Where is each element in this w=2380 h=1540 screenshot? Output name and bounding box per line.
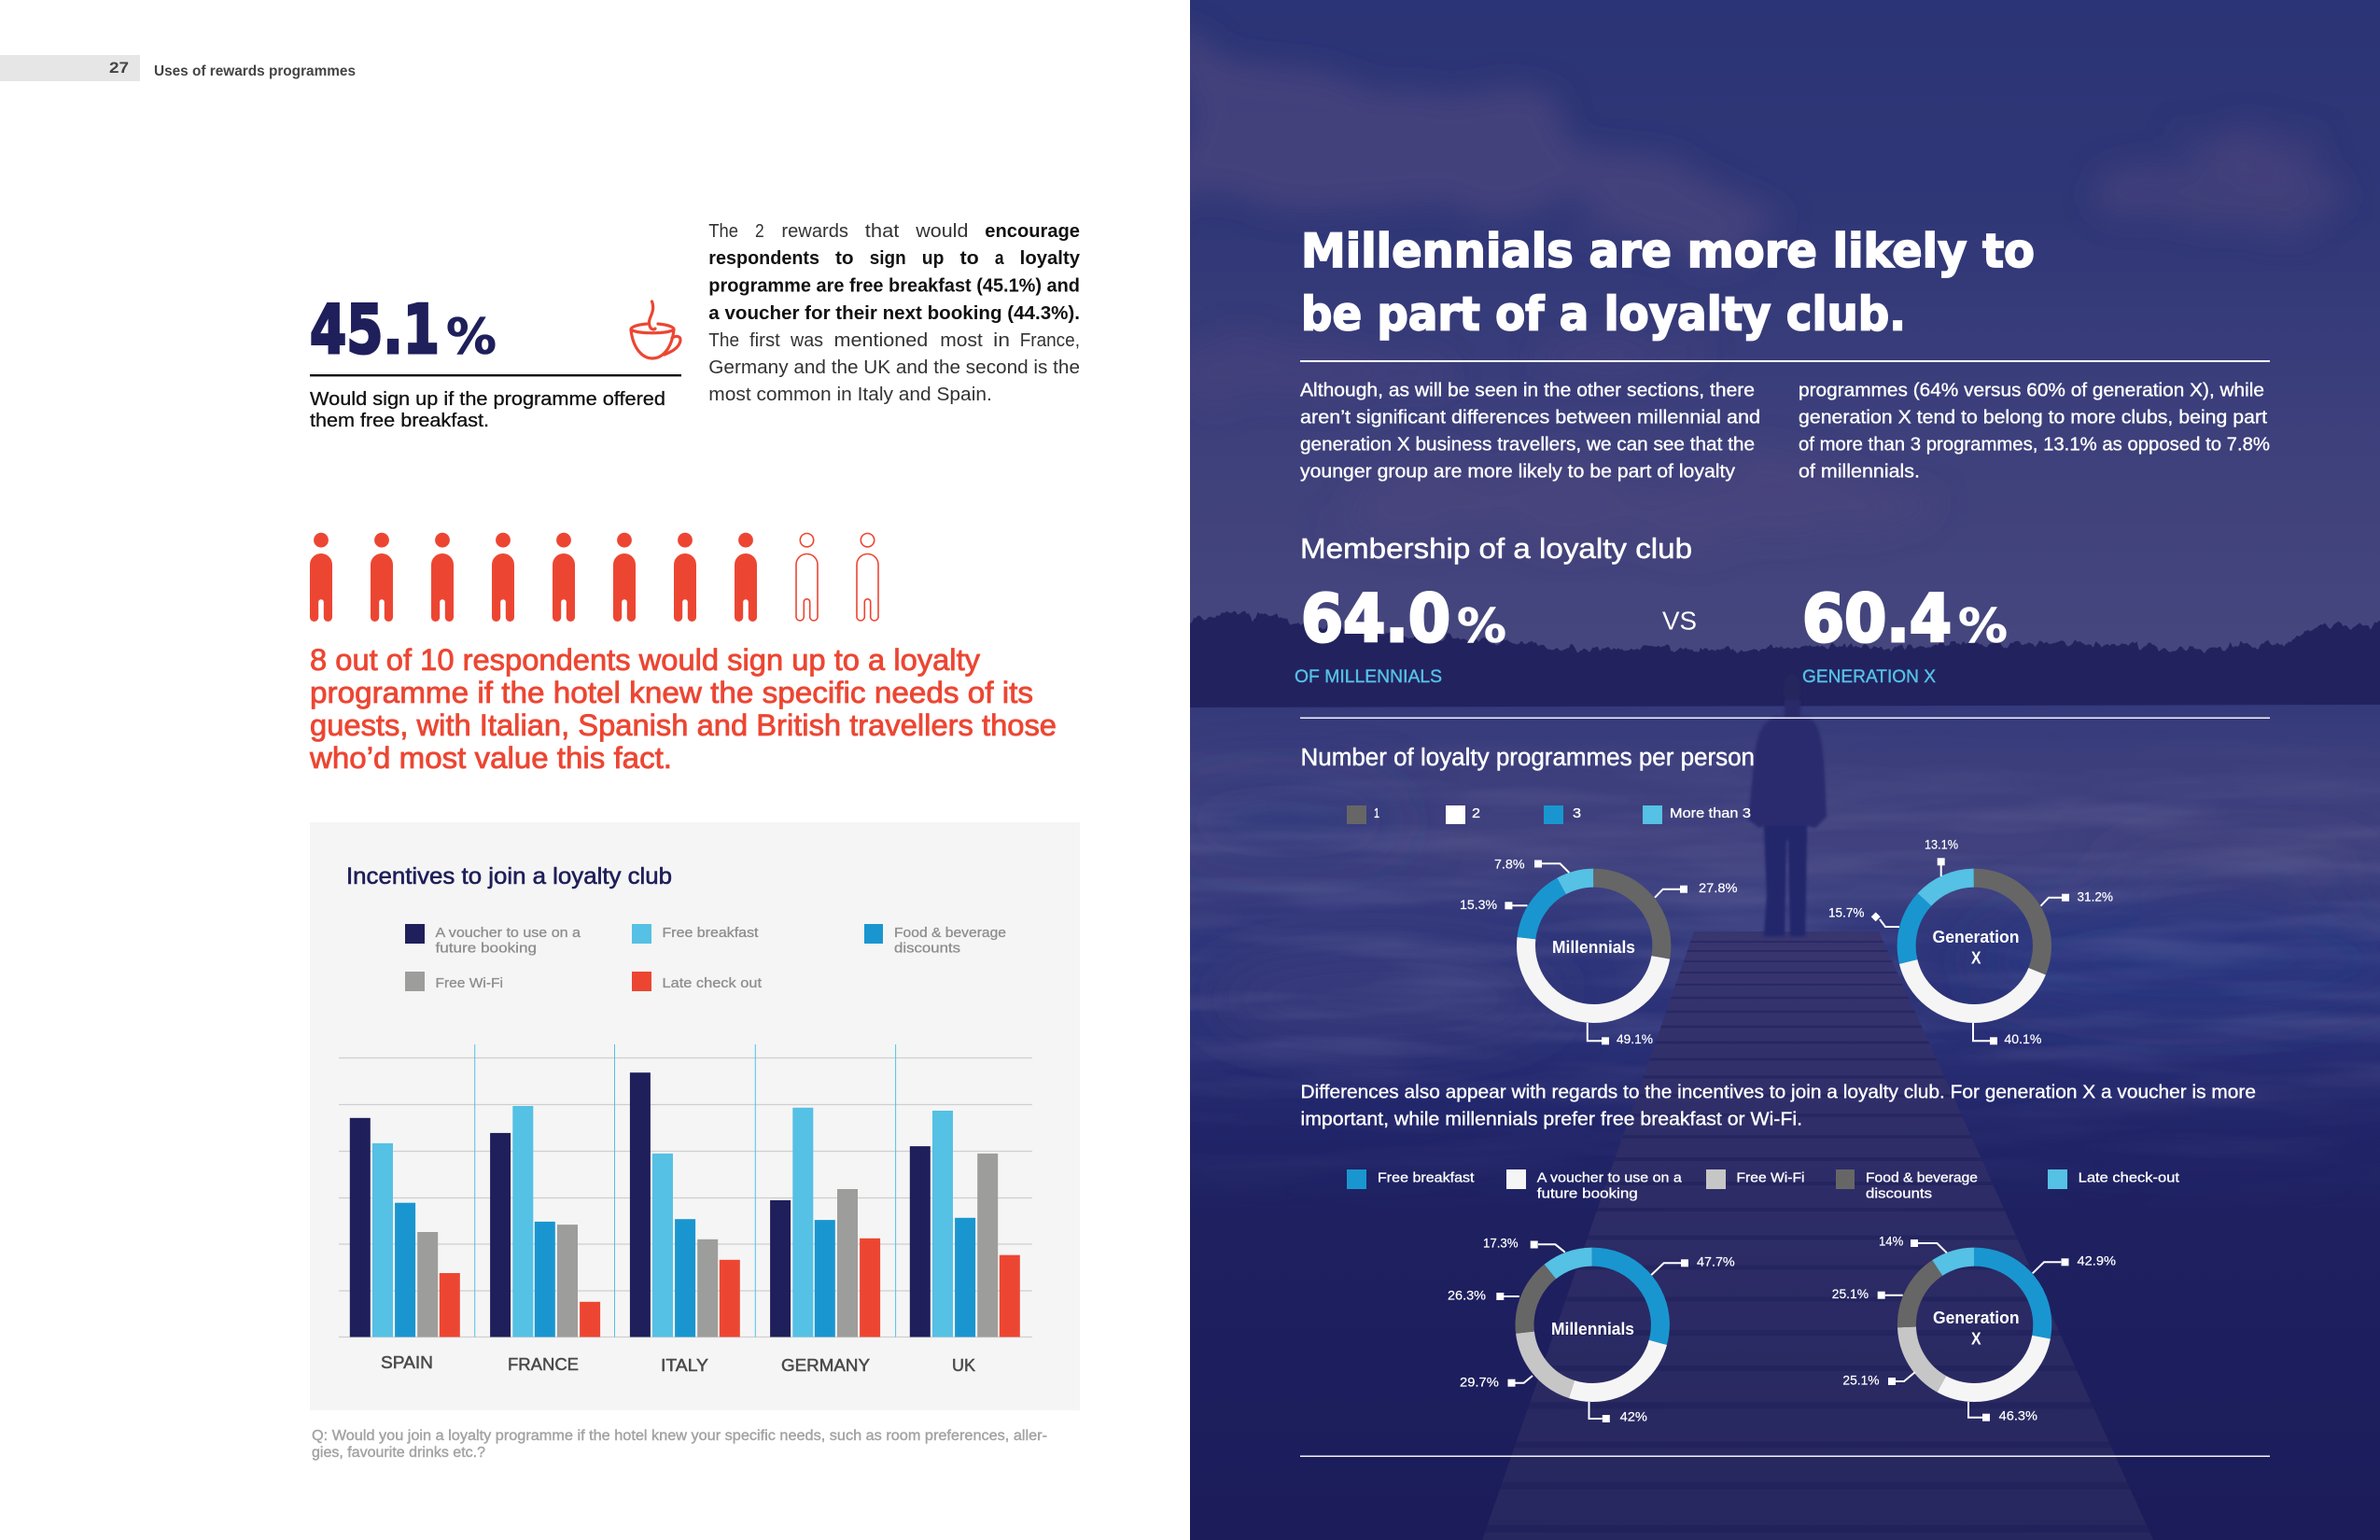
legend: incentives: Free Wi-Fi xyxy=(1736,1170,1805,1186)
membership heading: Membership of a loyalty club xyxy=(1300,532,1692,565)
stat: 64.0% millennials xyxy=(1295,581,1506,687)
right intro paragraph, column 1: Although, as will be seen in the other sections, there xyxy=(1300,381,1755,401)
donut: millennials programmes: Millennials xyxy=(1552,938,1635,957)
intro paragraph: most common in Italy and Spain. xyxy=(708,385,992,405)
intro paragraph: Germany and the UK and the second is the xyxy=(708,357,1080,378)
left page background xyxy=(0,0,1190,1540)
legend: programmes per person: 1 xyxy=(1374,805,1379,821)
bars: France xyxy=(490,1106,600,1337)
intro paragraph: The xyxy=(708,330,739,351)
intro paragraph: a xyxy=(995,248,1004,269)
intro paragraph: would xyxy=(915,221,968,242)
page number tab xyxy=(0,55,140,81)
country labels: GERMANY xyxy=(781,1356,870,1375)
dock xyxy=(1482,931,2152,1540)
right intro paragraph, column 1: aren’t significant differences between millennial and xyxy=(1300,407,1760,427)
differences paragraph xyxy=(1301,1083,2256,1130)
country labels xyxy=(381,1353,975,1375)
page number tab: 27 xyxy=(109,59,129,77)
bars: Spain xyxy=(350,1118,460,1337)
right headline: Millennials are more likely to xyxy=(1301,224,2035,278)
bars: Italy xyxy=(630,1072,740,1337)
intro paragraph: a voucher for their next booking (44.3%). xyxy=(708,303,1080,324)
donut: generation X incentives: 25.1% xyxy=(1832,1287,1869,1301)
intro paragraph: most xyxy=(940,330,983,351)
donut: generation X programmes: 13.1% xyxy=(1925,838,1958,852)
donut: millennials programmes: 7.8% xyxy=(1494,857,1525,872)
intro paragraph: to xyxy=(959,248,979,269)
legend: incentives: future booking xyxy=(1537,1186,1638,1202)
intro paragraph: sign xyxy=(870,248,906,269)
legend: incentives: A voucher to use on a xyxy=(1537,1170,1682,1186)
treeline xyxy=(1190,610,2380,707)
red headline: guests, with Italian, Spanish and British travellers those xyxy=(310,708,1057,742)
intro paragraph: encourage xyxy=(985,221,1080,242)
donut: generation X incentives: 46.3% xyxy=(1999,1409,2037,1423)
legend: incentives: Free breakfast xyxy=(1378,1170,1475,1186)
legend xyxy=(405,924,1006,991)
legend: programmes per person: 2 xyxy=(1472,805,1480,821)
stat number: 45.1 xyxy=(310,290,440,369)
donut: millennials incentives: 29.7% xyxy=(1460,1375,1499,1389)
intro paragraph: first xyxy=(749,330,780,351)
legend: A voucher to use on a xyxy=(435,925,581,941)
donut: generation X programmes: Generation xyxy=(1932,928,2020,946)
country labels: UK xyxy=(952,1356,975,1375)
panel title: Incentives to join a loyalty club xyxy=(346,863,672,889)
legend: Late check out xyxy=(663,975,763,991)
legend: incentives: Late check-out xyxy=(2079,1170,2180,1186)
donut: millennials incentives xyxy=(1448,1237,1735,1424)
donut: generation X incentives: 42.9% xyxy=(2078,1254,2116,1268)
intro paragraph: The xyxy=(708,221,738,242)
legend: incentives: Food & beverage xyxy=(1866,1170,1978,1186)
pictogram: 8 of 10 people xyxy=(310,533,878,622)
intro paragraph: rewards xyxy=(781,221,848,242)
donut: millennials incentives: Millennials xyxy=(1551,1320,1634,1338)
stat: 64.0% millennials: 64.0 xyxy=(1301,581,1450,657)
donut: millennials programmes: 49.1% xyxy=(1617,1032,1653,1046)
intro paragraph: up xyxy=(922,248,944,269)
programmes heading: Number of loyalty programmes per person xyxy=(1301,745,1755,771)
stat divider xyxy=(310,374,681,376)
legend: Free breakfast xyxy=(663,925,759,941)
water streak texture xyxy=(1190,785,2380,1103)
donut: generation X programmes: 31.2% xyxy=(2078,890,2113,904)
country labels: SPAIN xyxy=(381,1353,433,1372)
legend: programmes per person: 3 xyxy=(1573,805,1581,821)
donut: millennials programmes: 27.8% xyxy=(1699,881,1738,895)
right intro paragraph, column 2: of millennials. xyxy=(1799,461,1920,482)
intro paragraph: France, xyxy=(1020,330,1080,351)
differences paragraph: Differences also appear with regards to the incentives to join a loyalty club. For generation X a voucher is more xyxy=(1301,1083,2256,1103)
stat: 45.1% free breakfast xyxy=(310,290,681,431)
legend: discounts xyxy=(894,941,960,956)
bars: UK xyxy=(910,1111,1020,1337)
right page photo background xyxy=(1167,0,2380,1540)
stat caption xyxy=(310,389,665,431)
donut: generation X incentives xyxy=(1832,1235,2116,1423)
intro paragraph: was xyxy=(790,330,823,351)
stat: 60.4% generation X xyxy=(1802,581,2008,687)
donut: generation X programmes: 40.1% xyxy=(2004,1032,2041,1046)
red headline: 8 out of 10 respondents would sign up to a loyalty xyxy=(310,643,980,677)
donut: generation X programmes: 15.7% xyxy=(1828,906,1865,920)
donut: millennials programmes xyxy=(1460,857,1738,1046)
donut: millennials incentives: 47.7% xyxy=(1697,1255,1735,1269)
right intro paragraph, column 2 xyxy=(1799,381,2270,482)
intro paragraph: that xyxy=(865,221,900,242)
survey question note: gies, favourite drinks etc.? xyxy=(312,1445,485,1461)
vs label: VS xyxy=(1662,607,1697,635)
bars: Germany xyxy=(770,1108,880,1337)
red headline: who’d most value this fact. xyxy=(309,741,672,775)
country labels: ITALY xyxy=(661,1356,708,1375)
stat percent sign: % xyxy=(446,309,497,366)
red headline xyxy=(309,643,1057,775)
right intro paragraph, column 2: of more than 3 programmes, 13.1% as opposed to 7.8% xyxy=(1799,435,2270,455)
intro paragraph: respondents xyxy=(708,248,819,269)
section label: Uses of rewards programmes xyxy=(154,63,356,79)
stat: 64.0% millennials: OF MILLENNIALS xyxy=(1295,666,1442,687)
right headline: be part of a loyalty club. xyxy=(1301,287,1906,342)
right intro paragraph, column 2: generation X tend to belong to more clubs, being part xyxy=(1799,407,2267,427)
legend: Free Wi-Fi xyxy=(435,975,503,991)
intro paragraph: to xyxy=(835,248,854,269)
intro paragraph: in xyxy=(993,330,1010,351)
differences paragraph: important, while millennials prefer free breakfast or Wi-Fi. xyxy=(1301,1110,1802,1130)
legend: programmes per person: More than 3 xyxy=(1670,805,1751,821)
donut: millennials programmes: 15.3% xyxy=(1460,898,1497,912)
stat: 64.0% millennials: % xyxy=(1457,599,1506,653)
country labels: FRANCE xyxy=(508,1355,579,1374)
icon: coffee cup xyxy=(631,301,680,358)
donut: generation X incentives: X xyxy=(1971,1330,1981,1349)
right intro paragraph, column 1: younger group are more likely to be part of loyalty xyxy=(1300,461,1735,482)
donut: millennials incentives: 26.3% xyxy=(1448,1289,1486,1303)
right intro paragraph, column 2: programmes (64% versus 60% of generation X), while xyxy=(1799,381,2264,401)
stat: 60.4% generation X: % xyxy=(1958,599,2008,653)
stat caption: Would sign up if the programme offered xyxy=(310,389,665,410)
donut: millennials incentives: 17.3% xyxy=(1483,1237,1519,1251)
legend: Food & beverage xyxy=(894,925,1006,941)
stat: 60.4% generation X: GENERATION X xyxy=(1802,666,1936,687)
legend: programmes per person xyxy=(1347,805,1751,824)
donut: generation X incentives: 14% xyxy=(1879,1235,1903,1249)
donut: generation X programmes xyxy=(1828,838,2113,1046)
survey question note xyxy=(312,1428,1047,1461)
red headline: programme if the hotel knew the specific needs of its xyxy=(310,676,1033,709)
stat: 60.4% generation X: 60.4 xyxy=(1802,581,1952,657)
donut: generation X incentives: Generation xyxy=(1933,1309,2020,1327)
donut: generation X programmes: X xyxy=(1971,948,1981,967)
stat caption: them free breakfast. xyxy=(310,411,489,431)
donut: millennials incentives: 42% xyxy=(1620,1410,1647,1424)
person silhouette xyxy=(1748,674,1827,936)
right headline xyxy=(1301,224,2035,342)
intro paragraph: mentioned xyxy=(834,330,928,351)
right intro paragraph, column 1: generation X business travellers, we can see that the xyxy=(1300,435,1755,455)
intro paragraph: loyalty xyxy=(1020,248,1081,269)
legend: incentives xyxy=(1347,1169,2180,1202)
panel: incentives bar chart xyxy=(310,822,1080,1410)
donut: generation X incentives: 25.1% xyxy=(1842,1374,1880,1388)
intro paragraph: 2 xyxy=(755,221,764,242)
legend: future booking xyxy=(435,941,537,956)
survey question note: Q: Would you join a loyalty programme if the hotel knew your specific needs, such as room preferences, aller- xyxy=(312,1428,1047,1444)
right intro paragraph, column 1 xyxy=(1300,381,1760,482)
intro paragraph xyxy=(708,221,1081,405)
intro paragraph: programme are free breakfast (45.1%) and xyxy=(708,276,1080,297)
legend: incentives: discounts xyxy=(1866,1186,1932,1202)
